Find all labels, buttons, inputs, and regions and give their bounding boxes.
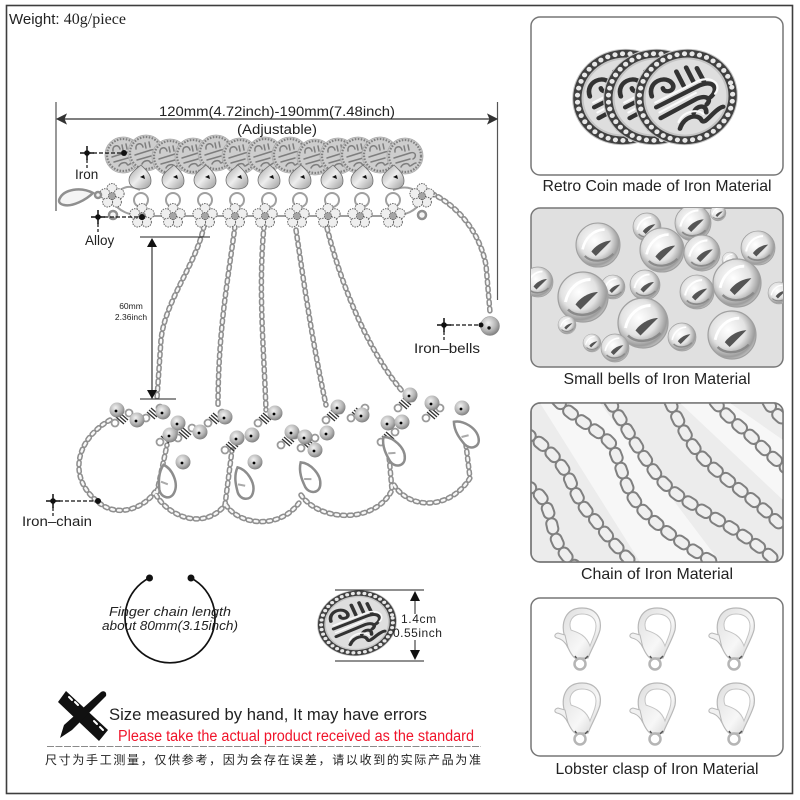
callout: iron chain: Iron–chain bbox=[22, 514, 92, 529]
overall width dimension bbox=[56, 102, 498, 300]
callout: iron chain bbox=[22, 494, 101, 529]
icon: crossed ruler and pencil bbox=[58, 691, 108, 741]
hearts bbox=[129, 165, 404, 189]
caption: bells: Small bells of Iron Material bbox=[564, 371, 750, 388]
note: measurement disclaimer: Size measured by hand, It may have errors bbox=[109, 705, 427, 724]
caption: chain: Chain of Iron Material bbox=[581, 566, 733, 583]
overall width dimension: 120mm(4.72inch)-190mm(7.48inch) bbox=[159, 104, 395, 119]
callout: iron coin bbox=[75, 146, 127, 182]
bell knots bbox=[112, 394, 444, 454]
callout: iron bells: Iron–bells bbox=[414, 341, 480, 356]
dimension: 60mm chain length: 2.36inch bbox=[115, 312, 147, 322]
dimension: 60mm chain length: 60mm bbox=[119, 301, 143, 311]
coin size diagram: 1.4cm bbox=[401, 612, 437, 626]
note: red disclaimer: Please take the actual product received as the standard bbox=[118, 728, 474, 745]
panel: retro coin bbox=[531, 17, 783, 175]
end bell bbox=[480, 316, 500, 336]
caption: coin: Retro Coin made of Iron Material bbox=[542, 178, 772, 195]
left clasp bbox=[59, 189, 426, 219]
drop chains and finger loops bbox=[79, 191, 490, 522]
main product: bracelet with chains bbox=[59, 135, 500, 522]
finger ring diagram: Finger chain length bbox=[109, 604, 231, 619]
callout: iron bells bbox=[414, 318, 484, 356]
link rings bbox=[112, 187, 422, 216]
finger ring diagram bbox=[102, 574, 238, 663]
coin size diagram bbox=[313, 585, 442, 661]
coin row bbox=[105, 135, 423, 175]
finger ring diagram: about 80mm(3.15inch) bbox=[102, 618, 238, 633]
flowers bbox=[100, 184, 434, 227]
dimension: 60mm chain length bbox=[115, 237, 210, 399]
coin size diagram: 0.55inch bbox=[393, 626, 442, 640]
panel: chain bbox=[526, 400, 786, 566]
note: chinese disclaimer: 尺寸为手工测量，仅供参考，因为会存在误差，请以收到的实际产品为准 bbox=[45, 752, 481, 767]
callout: alloy: Alloy bbox=[85, 233, 115, 248]
loop bells bbox=[110, 388, 470, 470]
panel: lobster clasp bbox=[531, 598, 783, 756]
loop clasps bbox=[157, 415, 482, 500]
callout: iron coin: Iron bbox=[75, 167, 98, 182]
callout: alloy bbox=[85, 210, 145, 248]
panel: small bells bbox=[523, 205, 790, 367]
weight label: Weight: 40g/piece bbox=[9, 11, 126, 28]
caption: clasp: Lobster clasp of Iron Material bbox=[556, 761, 758, 778]
overall width dimension: (Adjustable) bbox=[237, 122, 317, 137]
